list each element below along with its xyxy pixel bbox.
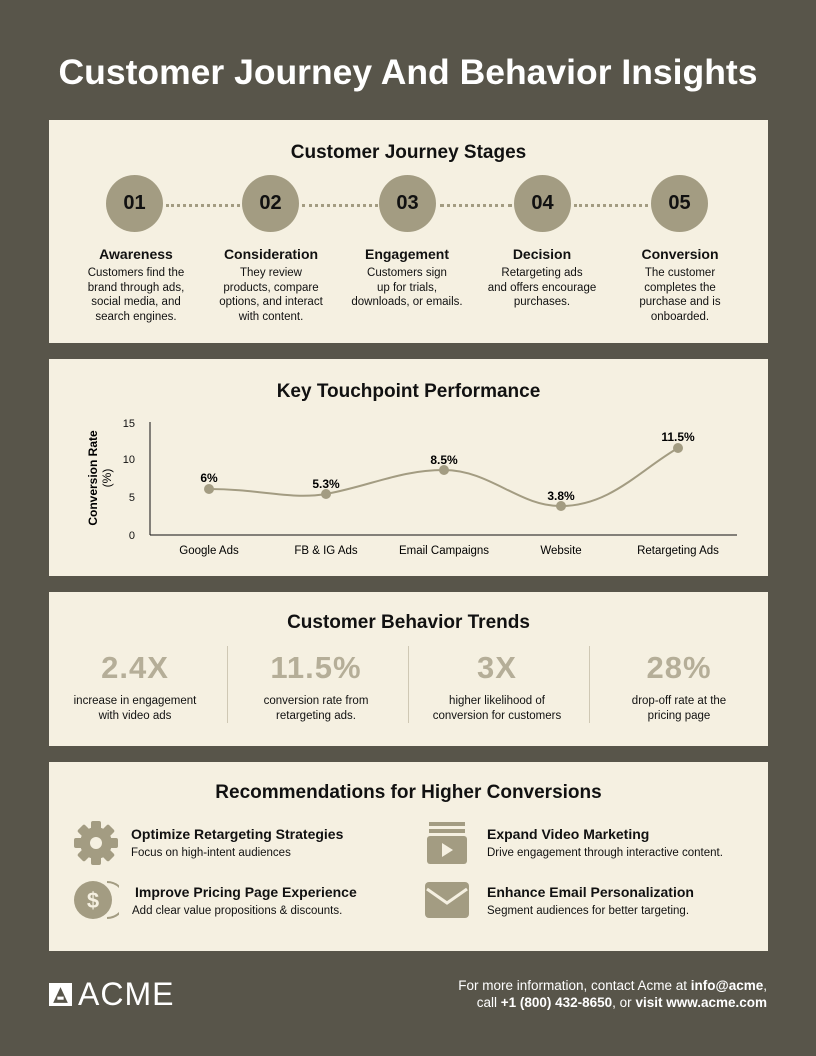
icon: envelope bbox=[425, 882, 469, 918]
stage 05: 05 bbox=[668, 192, 691, 214]
icon: video bbox=[427, 822, 467, 864]
footer contact bbox=[458, 978, 767, 1010]
line chart: 10 bbox=[123, 454, 135, 466]
stat: 28%: pricing page bbox=[648, 710, 710, 722]
line chart: Email Campaigns bbox=[399, 545, 489, 557]
line chart: 5.3% bbox=[312, 477, 340, 491]
icon: dollar coin: $ bbox=[87, 888, 99, 913]
stage 04: 04 bbox=[531, 192, 554, 214]
stage 04 bbox=[488, 175, 596, 308]
panel: behavior trends bbox=[49, 592, 768, 746]
stage 02: options, and interact bbox=[219, 296, 323, 308]
stage 05: Conversion bbox=[641, 246, 718, 262]
rec: video bbox=[487, 826, 723, 859]
stage 05 bbox=[639, 175, 721, 322]
stage 03: downloads, or emails. bbox=[351, 296, 463, 308]
stage 01: Awareness bbox=[99, 246, 173, 262]
stage 03: up for trials, bbox=[377, 282, 437, 294]
line chart: FB & IG Ads bbox=[294, 545, 358, 557]
title: Customer Journey And Behavior Insights bbox=[59, 52, 757, 92]
stage 02: They review bbox=[240, 267, 302, 279]
rec: pricing bbox=[132, 884, 357, 917]
stage 05: onboarded. bbox=[651, 310, 709, 322]
rec: email bbox=[487, 884, 694, 917]
line chart: 6% bbox=[200, 471, 218, 485]
stat: 2.4x: 2.4X bbox=[101, 650, 169, 685]
rec: pricing: Add clear value propositions & discounts. bbox=[132, 905, 342, 917]
stat: 3x: 3X bbox=[477, 650, 517, 685]
panel: recommendations bbox=[49, 762, 768, 951]
icon: dollar coin bbox=[74, 881, 119, 919]
stat: 3x bbox=[433, 650, 561, 722]
stat: 11.5%: 11.5% bbox=[270, 650, 362, 685]
rec: video: Drive engagement through interactive content. bbox=[487, 847, 723, 859]
stat: 2.4x: increase in engagement bbox=[74, 695, 196, 707]
stat: 11.5%: retargeting ads. bbox=[276, 710, 356, 722]
line chart: 11.5% bbox=[661, 430, 695, 444]
stage 01: search engines. bbox=[95, 310, 177, 322]
stage 02: Consideration bbox=[224, 246, 318, 262]
stage 05: completes the bbox=[644, 282, 716, 294]
stage 05: The customer bbox=[645, 267, 715, 279]
line chart: 15 bbox=[123, 418, 135, 430]
stage 03 bbox=[351, 175, 463, 308]
logo: ACME: ACME bbox=[78, 976, 174, 1012]
line chart bbox=[86, 418, 737, 557]
heading: touchpoint: Key Touchpoint Performance bbox=[277, 381, 540, 402]
stage 01: 01 bbox=[123, 192, 146, 214]
rec: retargeting bbox=[131, 826, 343, 859]
rec: email: Enhance Email Personalization bbox=[487, 884, 694, 900]
stage 01: Customers find the bbox=[88, 267, 184, 279]
stage 02 bbox=[219, 175, 323, 322]
panel: journey stages bbox=[49, 120, 768, 343]
heading: recommendations: Recommendations for Higher Conversions bbox=[215, 782, 602, 803]
footer contact: For more information, contact Acme at info@acme, bbox=[458, 978, 767, 993]
stat: 2.4x: with video ads bbox=[99, 710, 171, 722]
stat: 11.5%: conversion rate from bbox=[264, 695, 368, 707]
stage 03: 03 bbox=[396, 192, 419, 214]
stat: 28%: drop-off rate at the bbox=[632, 695, 726, 707]
rec: retargeting: Optimize Retargeting Strategies bbox=[131, 826, 343, 842]
stage 01: brand through ads, bbox=[88, 282, 184, 294]
stage 01 bbox=[88, 175, 184, 322]
stage 02: 02 bbox=[259, 192, 282, 214]
stage 04: and offers encourage bbox=[488, 282, 596, 294]
stage 04: purchases. bbox=[514, 296, 570, 308]
panel: touchpoint performance bbox=[49, 359, 768, 576]
stage 03: Engagement bbox=[365, 246, 449, 262]
icon: gear bbox=[74, 821, 118, 865]
stage 01: social media, and bbox=[91, 296, 181, 308]
rec: email: Segment audiences for better targeting. bbox=[487, 905, 689, 917]
line chart: 8.5% bbox=[430, 453, 458, 467]
stat: 3x: higher likelihood of bbox=[449, 695, 545, 707]
stage 05: purchase and is bbox=[639, 296, 721, 308]
rec: pricing: Improve Pricing Page Experience bbox=[135, 884, 357, 900]
line chart: 0 bbox=[129, 530, 135, 542]
heading: journey stages: Customer Journey Stages bbox=[291, 142, 526, 163]
stat: 11.5% bbox=[264, 650, 368, 722]
stat: 2.4x bbox=[74, 650, 196, 722]
footer contact: call +1 (800) 432-8650, or visit www.acme.com bbox=[477, 995, 767, 1010]
stage 04: Retargeting ads bbox=[501, 267, 583, 279]
rec: retargeting: Focus on high-intent audiences bbox=[131, 847, 291, 859]
stat: 28% bbox=[632, 650, 726, 722]
stat: 28%: 28% bbox=[646, 650, 712, 685]
line chart: Google Ads bbox=[179, 545, 239, 557]
line chart: 3.8% bbox=[547, 489, 575, 503]
stage 02: products, compare bbox=[223, 282, 319, 294]
line chart: 5 bbox=[129, 492, 135, 504]
heading: behavior trends: Customer Behavior Trends bbox=[287, 612, 530, 633]
stage 04: Decision bbox=[513, 246, 571, 262]
rec: video: Expand Video Marketing bbox=[487, 826, 649, 842]
line chart: Retargeting Ads bbox=[637, 545, 719, 557]
line chart: Conversion Rate bbox=[86, 430, 100, 526]
line chart: (%) bbox=[100, 469, 114, 487]
stat: 3x: conversion for customers bbox=[433, 710, 561, 722]
line chart: Website bbox=[540, 545, 582, 557]
stage 03: Customers sign bbox=[367, 267, 447, 279]
stage 02: with content. bbox=[239, 310, 303, 322]
